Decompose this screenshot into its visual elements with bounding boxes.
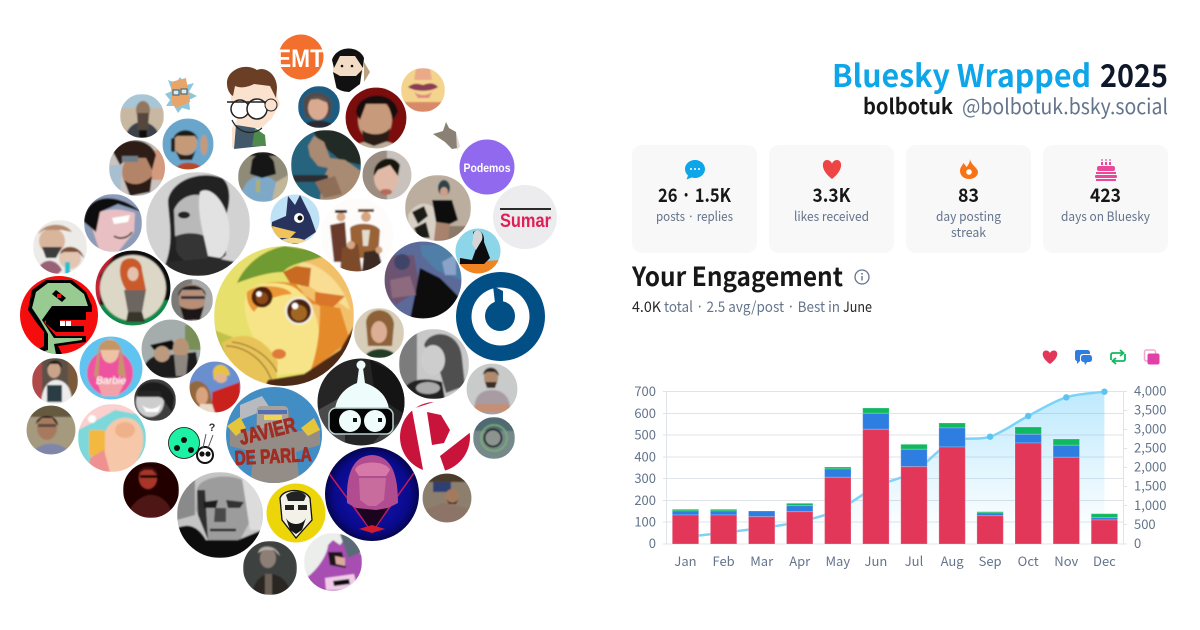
month labels: Nov [1054, 551, 1079, 570]
month labels: Sep [979, 551, 1002, 570]
avatar: Bender robot [317, 358, 406, 446]
avatar: EMT logo [276, 34, 324, 80]
icon: legend heart [1043, 350, 1057, 364]
grid lines [663, 392, 1127, 544]
left axis labels: 600 [634, 403, 656, 422]
avatar: two men with hat [141, 319, 201, 379]
avatar: older man portrait [243, 541, 297, 595]
avatar: Hopkins portrait [177, 472, 263, 558]
panel: day posting streak: 83 [958, 181, 979, 208]
left axis labels: 400 [634, 446, 656, 466]
avatar: Caesar bust [325, 447, 419, 541]
avatar: green ball and bug: ? [209, 422, 216, 434]
avatar: blue hair illustration [455, 228, 501, 274]
panel: days on Bluesky [1043, 145, 1168, 253]
avatar: woman with glasses [26, 405, 76, 455]
month labels: Jun [865, 551, 887, 570]
right axis labels: 1,000 [1134, 495, 1166, 514]
avatar: yellow badge [266, 483, 326, 543]
month labels [674, 551, 1116, 570]
avatar: red P logo [400, 402, 470, 470]
avatar: Barbie poster [79, 336, 143, 400]
left axis labels: 0 [649, 533, 656, 552]
avatar: man with long blond hair [354, 308, 404, 358]
avatar: yellow hat couple [189, 361, 241, 413]
panel: days on Bluesky: days on Bluesky [1061, 206, 1150, 225]
avatar: pixel dinosaur [20, 276, 98, 354]
user handle: bolbotuk [863, 91, 953, 121]
icon: chat bubble [685, 160, 705, 180]
avatar: Sumar logo [493, 185, 557, 249]
month labels: Aug [941, 551, 964, 570]
avatar: Vader mask [238, 152, 290, 202]
title: Bluesky Wrapped [832, 51, 1091, 96]
cumulative line [686, 388, 1108, 537]
avatar: blockhead sticker [165, 77, 197, 113]
month labels: Feb [712, 551, 735, 570]
left axis labels: 500 [634, 424, 656, 444]
icon: flame [960, 159, 978, 179]
avatar: man with glasses in grey [171, 279, 213, 321]
avatar: Sumar logo: Sumar [500, 211, 552, 232]
avatar: EMT logo: EMT [276, 45, 324, 73]
avatar: man holding tablet [422, 473, 472, 523]
avatar: Javier de Parla: JAVIER [237, 414, 298, 450]
right axis labels: 1,500 [1134, 476, 1166, 494]
right axis labels: 0 [1134, 533, 1141, 552]
icon: legend reposts [1111, 350, 1125, 364]
avatar: bearded cartoon [332, 48, 370, 92]
chart legend icons [1043, 350, 1160, 365]
panel: likes received: likes received [794, 206, 869, 225]
title: 2025 [1100, 51, 1168, 96]
icon: legend quotes [1144, 350, 1160, 364]
panel: days on Bluesky: 423 [1090, 181, 1121, 208]
right axis labels [1134, 380, 1166, 552]
month labels: Mar [750, 551, 774, 570]
avatar: Javier de Parla [226, 387, 322, 484]
heading: Your Engagement: Your Engagement [631, 257, 843, 294]
month labels: Oct [1018, 551, 1039, 570]
avatar: man in patterned shirt [466, 363, 518, 415]
avatar: ring lens [473, 417, 515, 459]
avatar: Podemos logo [460, 140, 514, 194]
avatar: man in red light [123, 462, 179, 518]
avatar: woman with pistol [291, 130, 362, 200]
panel: day posting streak: day posting [936, 206, 1002, 225]
avatar: couple with sunglasses [33, 220, 87, 274]
avatar: blue ring logo [456, 272, 545, 361]
avatar: spider verse art [384, 241, 462, 319]
avatar: woman with grey hair [298, 86, 340, 128]
month labels: Dec [1093, 551, 1116, 570]
avatar: tattooed woman [405, 175, 471, 241]
avatar: green ball and bug [168, 422, 216, 463]
avatar: man on desert street [120, 94, 164, 138]
month labels: May [825, 551, 850, 570]
avatar: otter sticker [78, 404, 146, 472]
avatar cluster [20, 34, 557, 595]
engagement summary: June [843, 296, 872, 317]
panel: posts and replies [632, 145, 757, 253]
right axis labels: 3,000 [1134, 418, 1166, 438]
avatar: cat peeking [433, 122, 460, 150]
avatar: Bluey [270, 194, 320, 244]
month labels: Apr [789, 551, 811, 570]
avatar: laughing glasses man [134, 379, 176, 421]
month labels: Jul [905, 551, 924, 570]
right axis labels: 500 [1134, 514, 1156, 533]
avatar: Barbie poster: Barbie [96, 375, 126, 387]
month labels: Jan [674, 551, 697, 570]
left axis labels [634, 381, 656, 552]
icon: legend replies [1075, 350, 1092, 365]
avatar: Podemos logo: Podemos [464, 161, 511, 175]
icon: info [855, 270, 869, 284]
panel: likes received [769, 145, 894, 253]
avatar: western group [329, 208, 384, 272]
icon: heart [823, 160, 841, 179]
stacked bar and line chart [634, 380, 1166, 570]
left axis labels: 100 [634, 512, 656, 530]
panel: likes received: 3.3K [812, 181, 851, 208]
avatar: purple batman cartoon [304, 530, 362, 591]
left axis labels: 200 [634, 490, 656, 509]
avatar: curly hair bearded man [109, 140, 166, 196]
avatar: red background man [345, 87, 407, 149]
avatar: moustache lips [401, 68, 445, 112]
avatar: woman with black hair [362, 150, 412, 200]
avatar: cartoon man with glasses [227, 67, 280, 149]
user handle [863, 91, 1168, 121]
left axis labels: 300 [634, 468, 656, 487]
panel: day posting streak: streak [951, 222, 987, 241]
icon: birthday cake [1095, 159, 1117, 181]
right axis labels: 4,000 [1134, 380, 1166, 400]
right axis labels: 2,000 [1134, 456, 1166, 476]
user handle: @bolbotuk.bsky.social [962, 91, 1168, 121]
avatar: woman black and white [399, 329, 469, 399]
avatar: redhead selfie [95, 250, 171, 326]
panel: posts and replies: 26 · 1.5K [658, 181, 732, 208]
avatar: headset man [162, 118, 214, 170]
panel: day posting streak [906, 145, 1031, 253]
bars [672, 408, 1118, 544]
left axis labels: 700 [634, 381, 656, 400]
avatar: Javier de Parla: DE PARLA [234, 444, 312, 470]
avatar: hand over face [146, 172, 250, 276]
avatar: orange creature [214, 246, 362, 392]
avatar: book man [32, 358, 78, 404]
avatar: comic guy [84, 194, 142, 252]
cumulative area [686, 392, 1104, 544]
panel: posts and replies: posts · replies [656, 206, 733, 225]
engagement summary: 4.0K [632, 296, 662, 317]
right axis labels: 2,500 [1134, 438, 1166, 456]
engagement summary: total · 2.5 avg/post · Best in [664, 296, 840, 317]
right axis labels: 3,500 [1134, 400, 1166, 418]
